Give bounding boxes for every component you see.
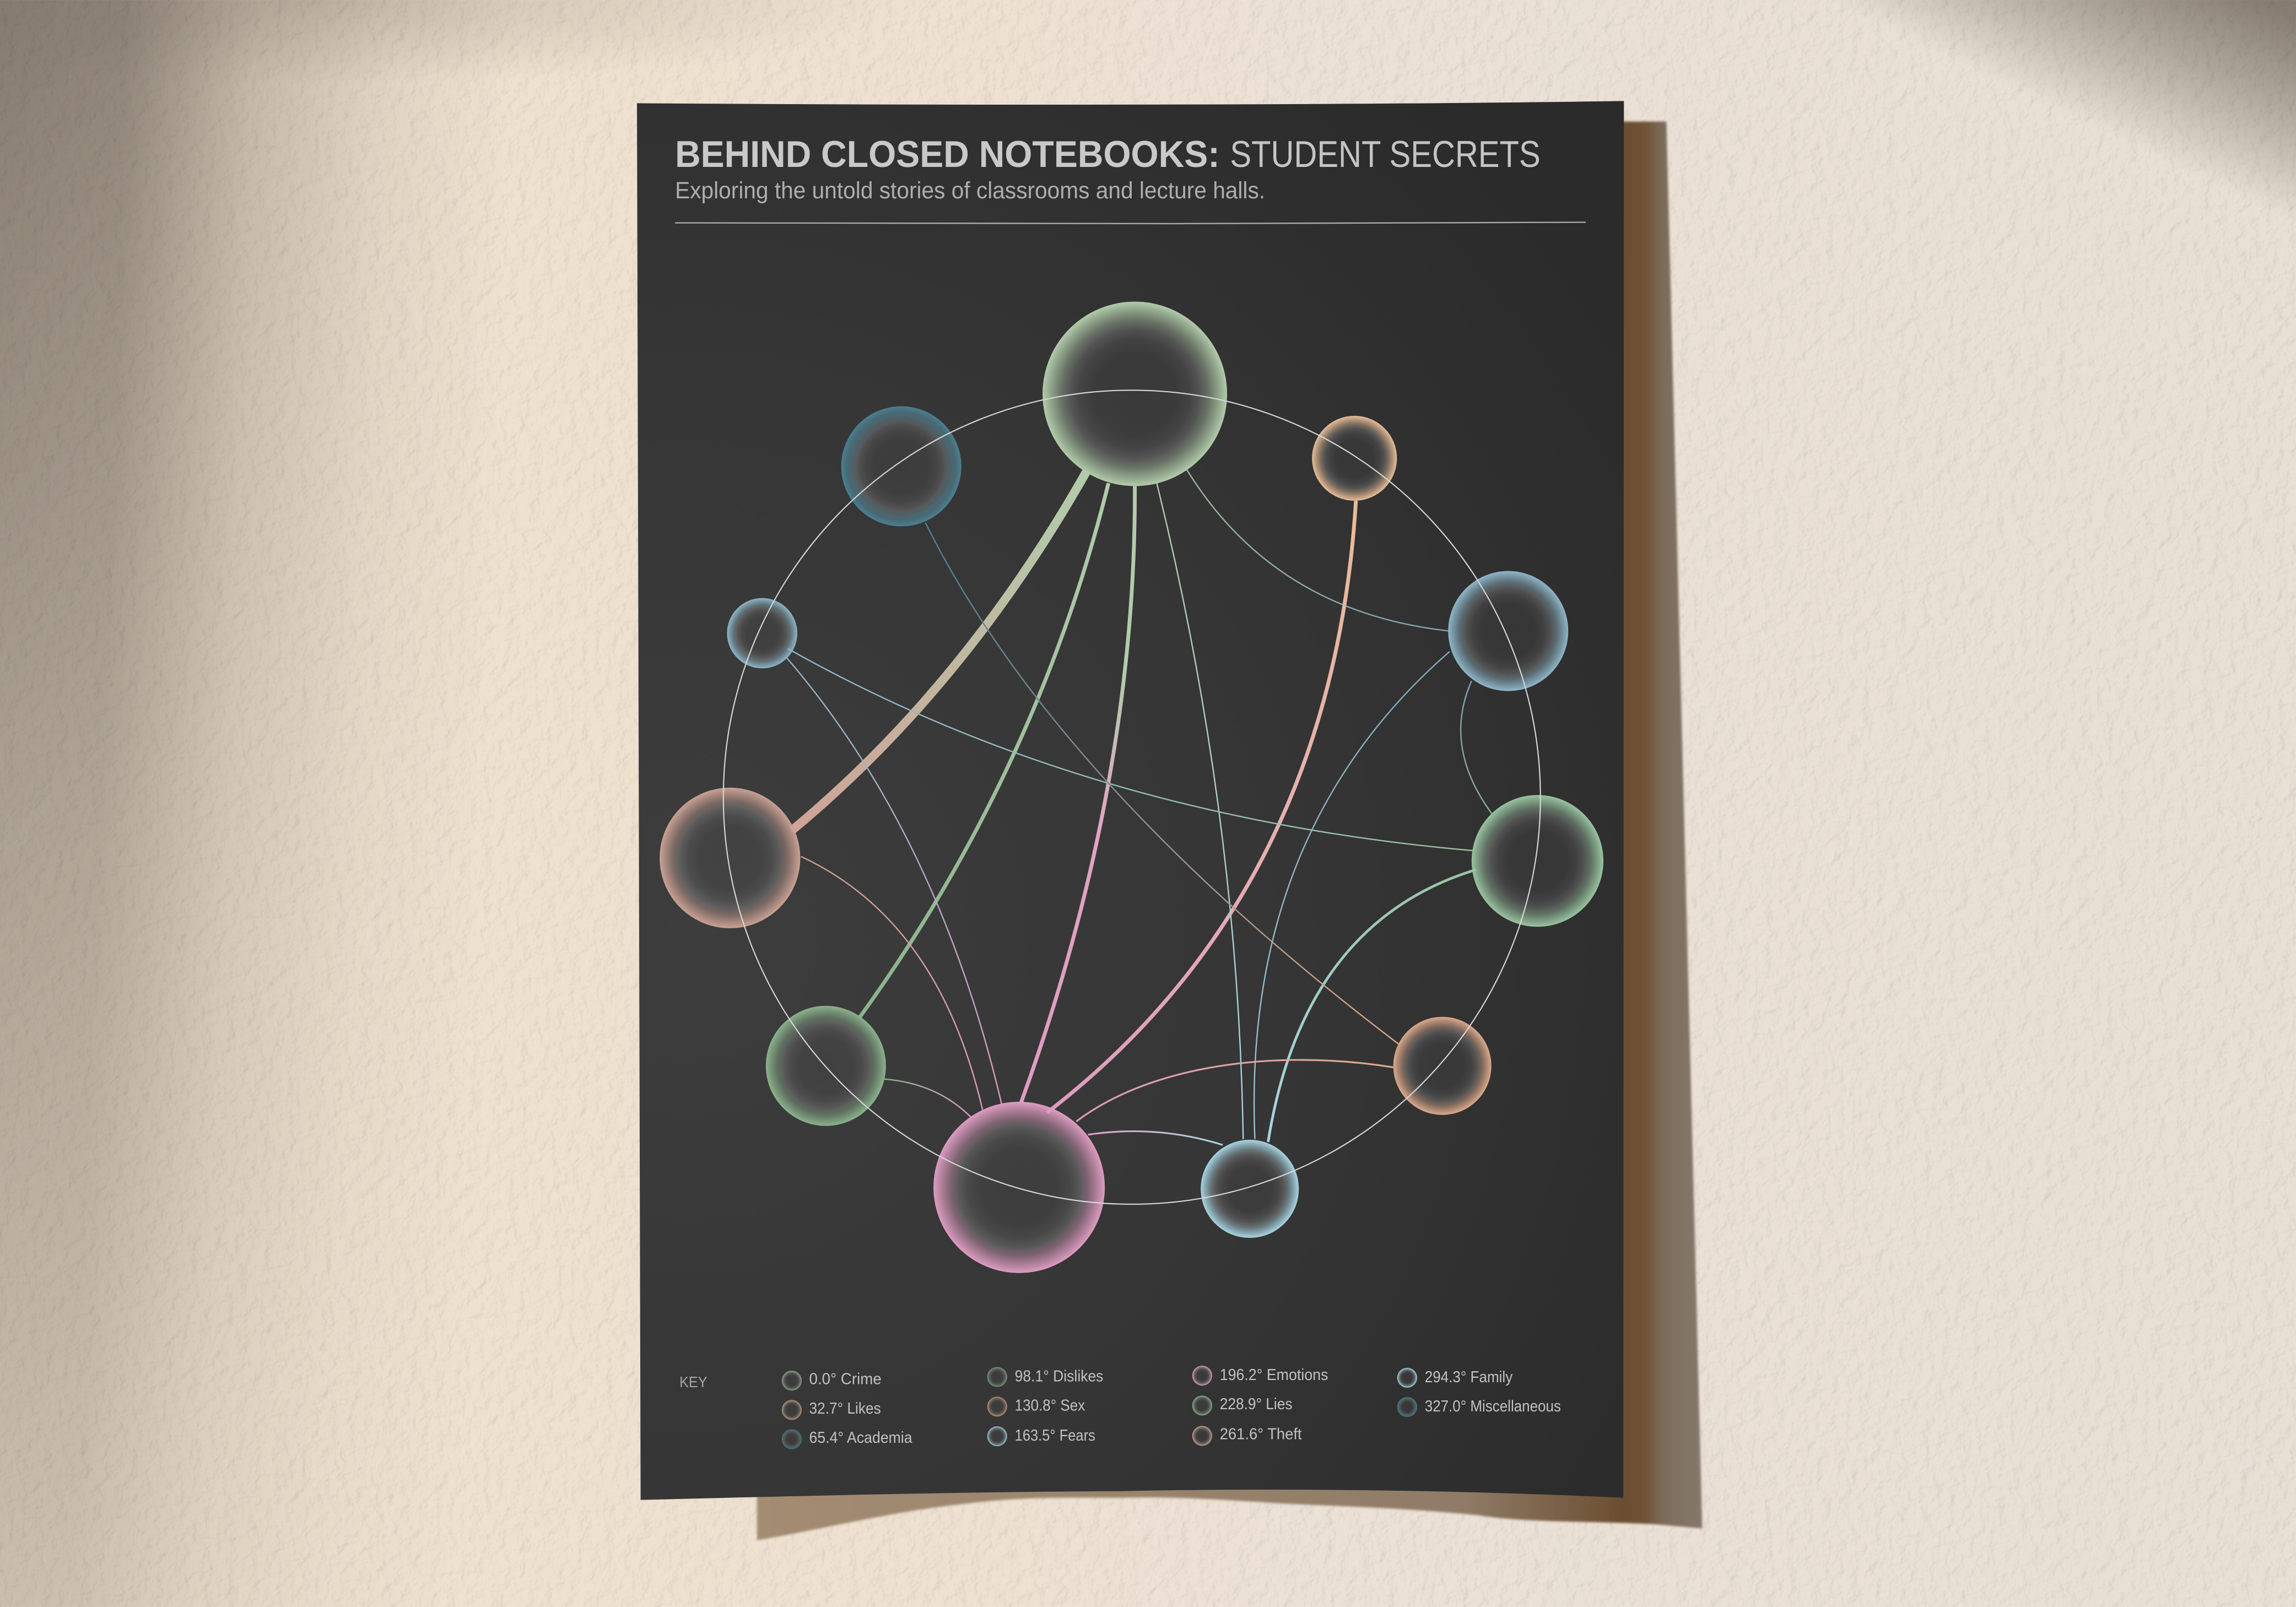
link: crime to emotions <box>1020 486 1135 1104</box>
link: emotions to family <box>1088 1131 1223 1145</box>
node: theft <box>660 788 800 928</box>
node: likes <box>1312 416 1397 501</box>
node: miscellaneous <box>841 407 961 526</box>
subtitle: Exploring the untold stories of classrooms and lecture halls. <box>675 178 1265 204</box>
legend item: lies <box>1192 1395 1293 1415</box>
link: fears to dislikes <box>788 648 1473 851</box>
legend item: sex: 130.8° Sex <box>1015 1397 1085 1415</box>
legend item: fears <box>987 1426 1095 1446</box>
legend item: lies: 228.9° Lies <box>1220 1395 1293 1413</box>
legend item: crime <box>782 1371 882 1390</box>
legend item: academia <box>782 1429 912 1449</box>
legend item: theft: 261.6° Theft <box>1220 1425 1302 1443</box>
link: miscellaneous to sex <box>926 523 1398 1044</box>
node: lies <box>766 1006 886 1126</box>
legend <box>679 1366 1561 1449</box>
node: fears <box>727 598 797 668</box>
poster panel <box>637 101 1624 1500</box>
node: dislikes <box>1472 795 1603 927</box>
title: BEHIND CLOSED NOTEBOOKS: <box>675 134 1220 175</box>
node: emotions <box>933 1102 1105 1273</box>
legend item: miscellaneous: 327.0° Miscellaneous <box>1425 1398 1561 1415</box>
link: dislikes to family <box>1268 870 1476 1142</box>
link: academia to family <box>1254 652 1450 1139</box>
legend item: theft <box>1192 1425 1302 1446</box>
legend item: academia: 65.4° Academia <box>809 1429 912 1447</box>
node: sex <box>1393 1017 1492 1115</box>
legend item: fears: 163.5° Fears <box>1015 1427 1095 1444</box>
legend item: miscellaneous <box>1397 1397 1561 1417</box>
poster sheet <box>637 101 1624 1500</box>
legend item: family: 294.3° Family <box>1425 1368 1513 1386</box>
link: crime to lies <box>860 483 1109 1018</box>
poster cast shadow <box>757 122 1702 1540</box>
title second part: STUDENT SECRETS <box>1230 134 1541 175</box>
node: crime <box>1042 302 1227 486</box>
link: academia to dislikes <box>1461 681 1492 814</box>
node: academia <box>1448 571 1568 691</box>
legend heading: KEY <box>679 1373 707 1390</box>
legend item: sex <box>987 1397 1085 1416</box>
link: theft to emotions <box>801 857 982 1110</box>
legend item: emotions: 196.2° Emotions <box>1220 1366 1328 1384</box>
network nodes <box>660 302 1603 1273</box>
link: lies to emotions <box>884 1079 971 1117</box>
outer ring <box>723 390 1541 1204</box>
network links <box>786 468 1492 1145</box>
legend item: likes: 32.7° Likes <box>809 1400 881 1417</box>
link: crime to family <box>1157 483 1243 1139</box>
link: fears to emotions <box>786 657 1002 1104</box>
legend item: crime: 0.0° Crime <box>809 1371 882 1388</box>
link: emotions to sex <box>1076 1060 1393 1122</box>
link: likes to emotions <box>1047 501 1356 1113</box>
legend item: likes <box>782 1400 881 1420</box>
legend item: dislikes: 98.1° Dislikes <box>1015 1367 1103 1385</box>
legend item: family <box>1397 1368 1513 1388</box>
legend item: emotions <box>1192 1366 1328 1386</box>
link: crime to academia <box>1186 468 1450 631</box>
link: crime to sex (thick) <box>792 472 1087 830</box>
legend item: dislikes <box>987 1367 1103 1387</box>
node: family <box>1201 1140 1299 1238</box>
